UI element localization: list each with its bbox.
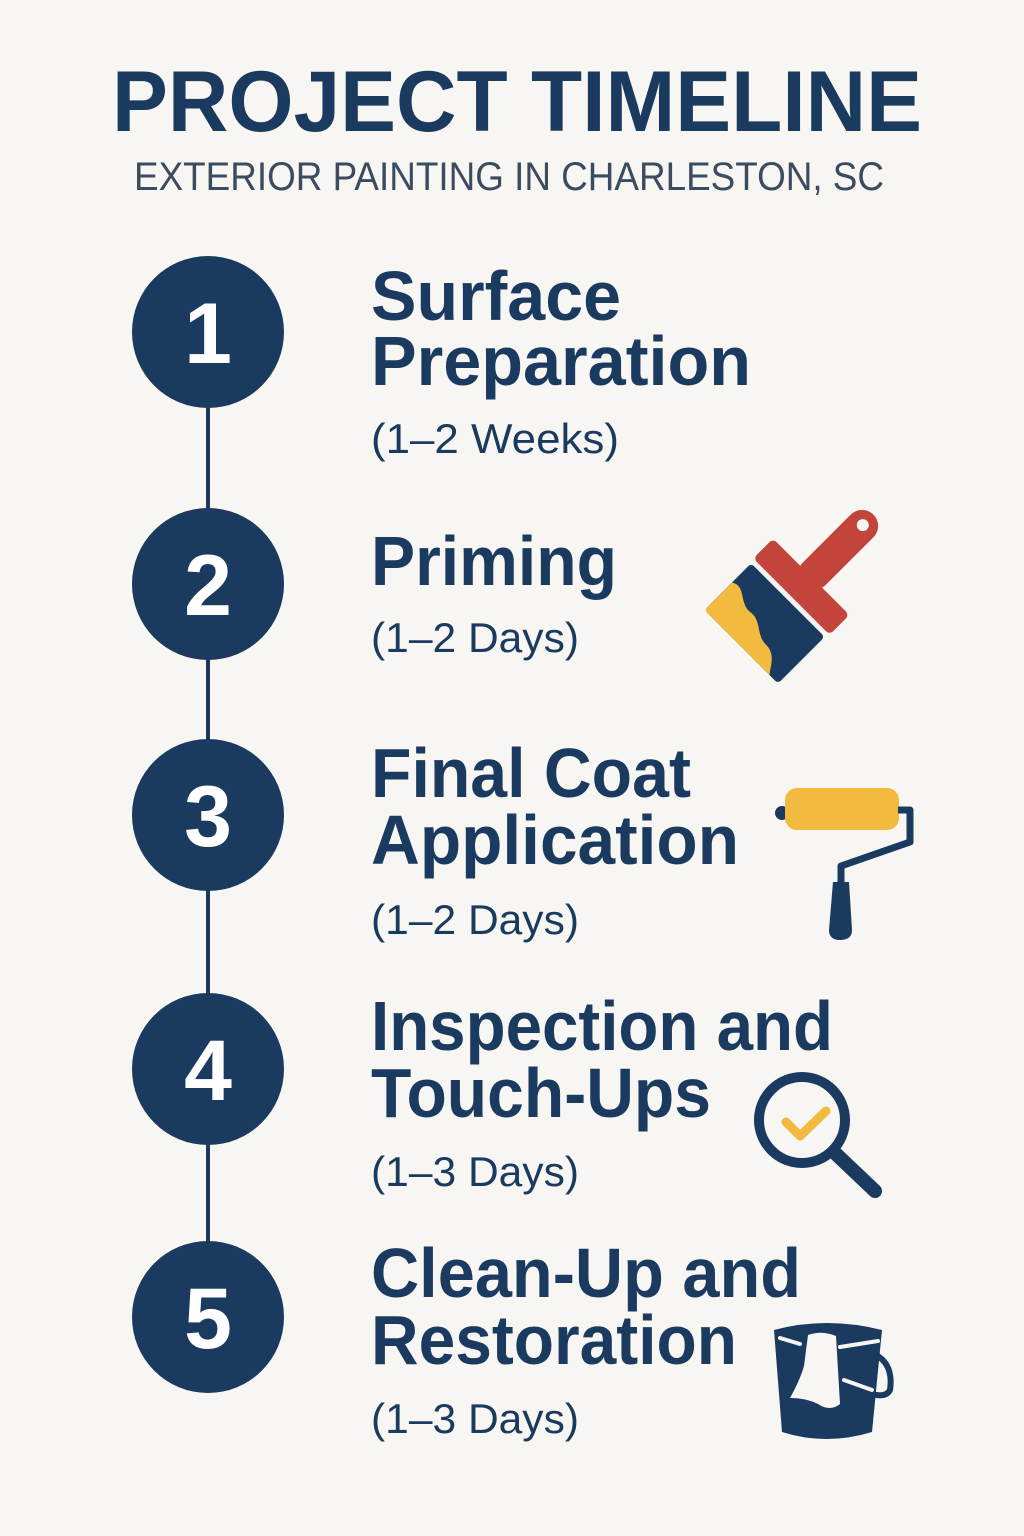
step 3 marker	[132, 739, 284, 891]
step 1 text: (1–2 Weeks)	[371, 415, 619, 462]
step 2 text: Priming	[371, 522, 617, 600]
step 5 text: Restoration	[371, 1301, 737, 1379]
step 4 text: (1–3 Days)	[371, 1148, 579, 1195]
timeline line	[206, 332, 210, 1317]
step 2 text	[371, 522, 617, 661]
icon: magnifier check	[759, 1077, 875, 1191]
icon: bucket with rag	[774, 1323, 891, 1439]
step 1 text: Surface	[371, 257, 621, 335]
icon: paint brush	[703, 476, 912, 685]
step 2 marker: 2	[184, 538, 232, 634]
step 1 text: Preparation	[371, 322, 751, 400]
icon: paint roller	[775, 788, 910, 940]
step 5 text: (1–3 Days)	[371, 1395, 579, 1442]
subtitle: EXTERIOR PAINTING IN CHARLESTON, SC	[134, 155, 884, 199]
step 5 marker: 5	[184, 1271, 232, 1367]
step 1 text	[371, 257, 751, 462]
step 2 marker	[132, 508, 284, 660]
step 2 text: (1–2 Days)	[371, 614, 579, 661]
title: PROJECT TIMELINE	[112, 54, 922, 150]
step 3 marker: 3	[184, 769, 232, 865]
step 5 text: Clean-Up and	[371, 1234, 801, 1312]
step 5 marker	[132, 1241, 284, 1393]
step 1 marker: 1	[184, 286, 232, 382]
step 3 text: Application	[371, 801, 739, 879]
step 4 marker	[132, 993, 284, 1145]
step 3 text: (1–2 Days)	[371, 896, 579, 943]
step 4 marker: 4	[184, 1023, 232, 1119]
step 4 text: Inspection and	[371, 987, 833, 1065]
step 4 text: Touch-Ups	[371, 1054, 711, 1132]
step 3 text	[371, 734, 739, 943]
step 1 marker	[132, 256, 284, 408]
step 5 text	[371, 1234, 801, 1442]
step 4 text	[371, 987, 833, 1195]
step 3 text: Final Coat	[371, 734, 691, 812]
